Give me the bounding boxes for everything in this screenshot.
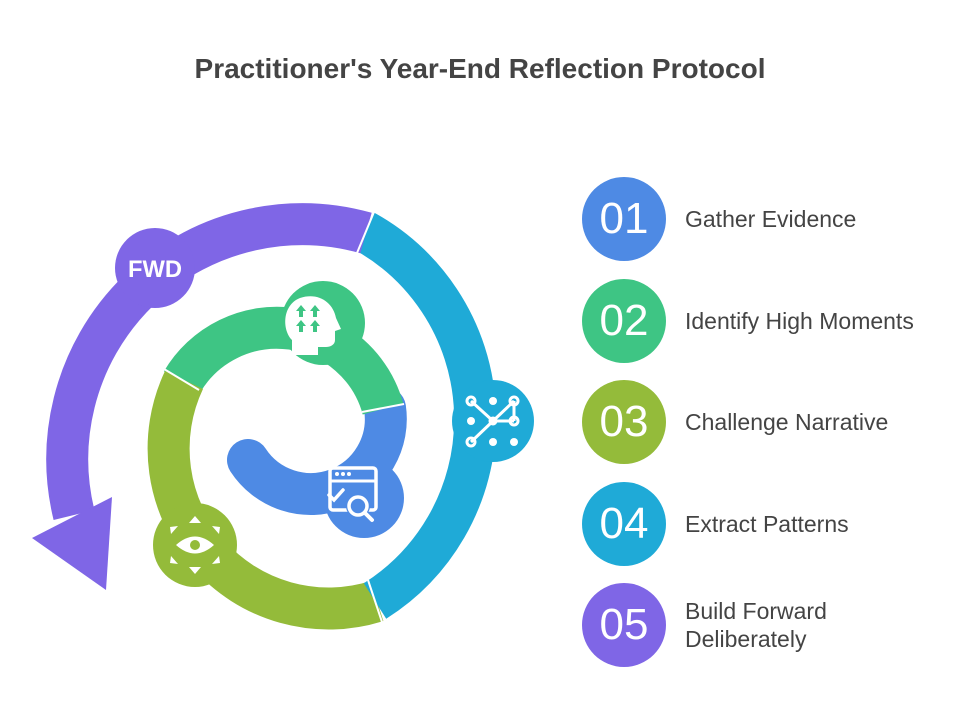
step 05: Build Forward — [685, 598, 827, 624]
title: Practitioner's Year-End Reflection Protocol — [195, 53, 765, 84]
step 04 — [582, 482, 849, 566]
arc: blue inner — [248, 408, 386, 494]
arc: olive — [164, 369, 377, 608]
icon: browser search — [324, 458, 404, 538]
icon: head with arrows — [281, 281, 365, 365]
step 03: Challenge Narrative — [685, 409, 888, 435]
step 02 — [582, 279, 914, 363]
icon: FWD — [115, 228, 195, 308]
icon: eye with arrows — [153, 503, 237, 587]
step 05: 05 — [600, 600, 648, 649]
icon: network — [452, 380, 534, 462]
step 03: 03 — [600, 397, 648, 446]
step 04: 04 — [600, 499, 648, 548]
step 02: Identify High Moments — [685, 308, 914, 334]
icon: FWD: FWD — [128, 256, 182, 283]
arc: teal — [364, 231, 475, 622]
step 05 — [582, 583, 827, 667]
step 03 — [582, 380, 888, 464]
step 01: 01 — [600, 194, 648, 243]
step 01: Gather Evidence — [685, 206, 856, 232]
step 05: Deliberately — [685, 626, 806, 652]
step 04: Extract Patterns — [685, 511, 849, 537]
step 02: 02 — [600, 296, 648, 345]
arc: purple with arrow — [32, 212, 374, 590]
arc: green — [182, 328, 404, 412]
step 01 — [582, 177, 856, 261]
